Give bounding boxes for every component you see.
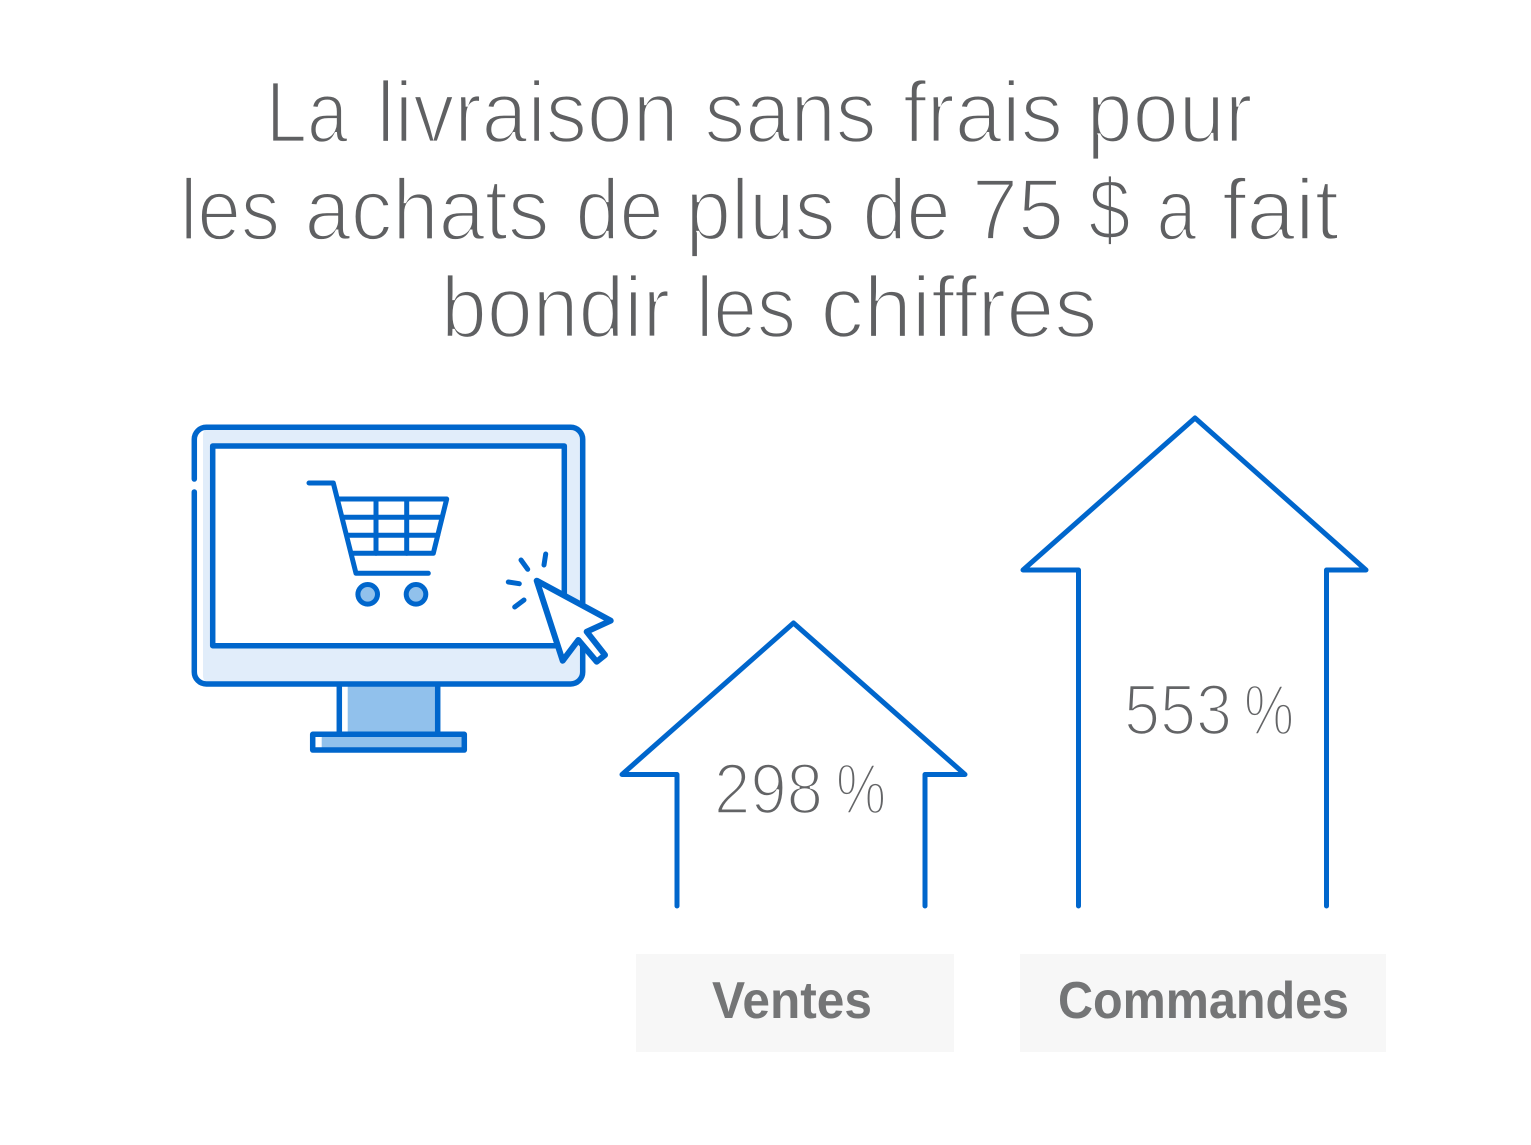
title: fait: [1222, 160, 1339, 258]
value: ventes: [714, 750, 886, 830]
label: ventes: Ventes: [712, 972, 872, 1030]
label: ventes: [636, 954, 954, 1052]
title: frais: [903, 63, 1063, 161]
arrow: commandes: [1023, 418, 1366, 906]
value: ventes: %: [836, 750, 886, 830]
label: commandes: Commandes: [1058, 972, 1349, 1030]
title: de: [862, 160, 950, 258]
icon: computer monitor with shopping cart and cursor: [194, 427, 611, 750]
icon: mouse cursor: [537, 581, 611, 662]
title: chiffres: [820, 258, 1098, 356]
title: achats: [304, 160, 550, 258]
icon: click sparks: [508, 554, 546, 607]
title: $: [1088, 160, 1130, 258]
value: commandes: 553: [1124, 672, 1232, 750]
value: commandes: %: [1244, 672, 1294, 750]
value: commandes: [1124, 672, 1294, 750]
value: ventes: 298: [714, 750, 823, 830]
icon: shopping cart: [309, 483, 447, 604]
monitor body: [194, 427, 583, 684]
title: La: [266, 63, 348, 161]
title: bondir: [441, 258, 670, 356]
title: [180, 63, 1339, 356]
arrow: ventes: [622, 623, 965, 906]
label: commandes: [1020, 954, 1386, 1052]
title: pour: [1086, 63, 1252, 161]
title: a: [1156, 160, 1197, 258]
title: les: [180, 160, 280, 258]
title: de: [576, 160, 664, 258]
monitor stand: [313, 684, 464, 750]
title: plus: [686, 160, 836, 258]
title: livraison: [376, 63, 678, 161]
title: 75: [972, 160, 1064, 258]
title: les: [696, 258, 796, 356]
title: sans: [704, 63, 876, 161]
